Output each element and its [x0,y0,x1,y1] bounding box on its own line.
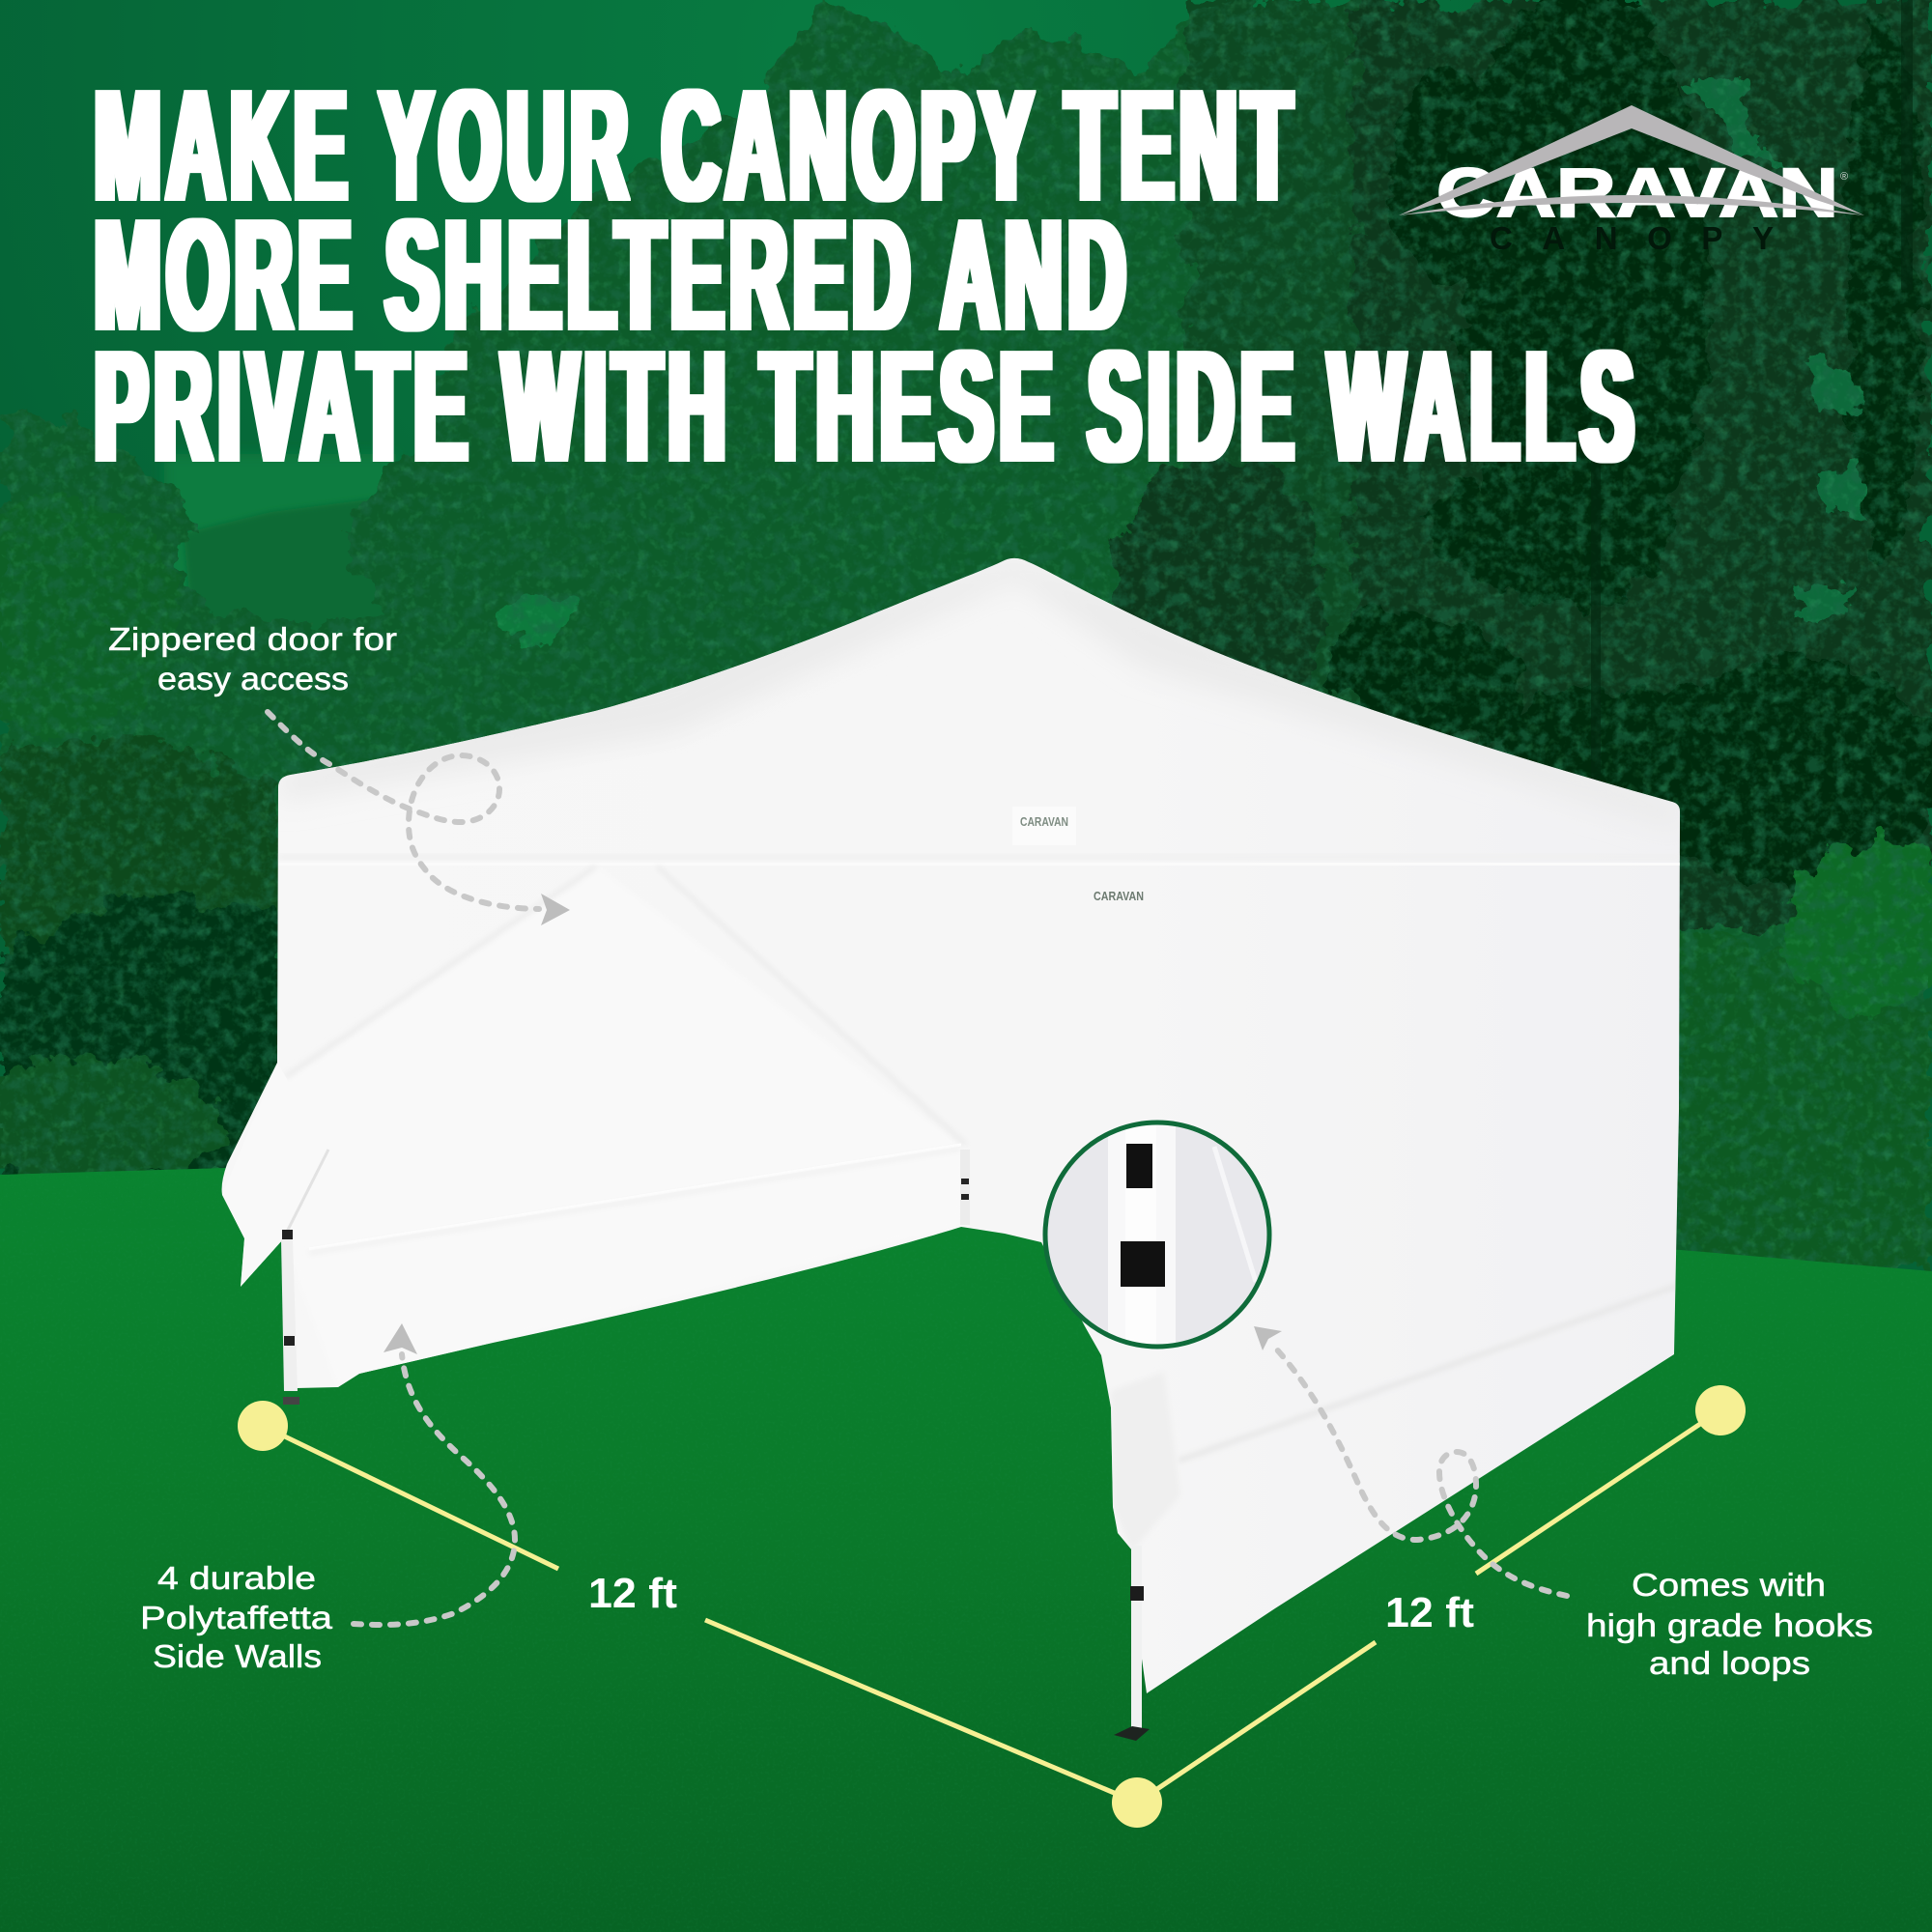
shrubs at lower right [1681,927,1932,1275]
callout: hooks and loops [1586,1567,1873,1681]
dot: left corner [238,1401,288,1451]
callout: zippered door: Zippered door for [108,621,397,657]
tent tag: front: CARAVAN [1020,814,1068,829]
title: MORE SHELTERED AND [95,187,1125,363]
pine trunks [1591,0,1913,840]
dimension label: right: 12 ft [1385,1589,1474,1636]
callout: hooks and loops: and loops [1649,1645,1810,1681]
transitional forest tone [1188,0,1381,773]
callout: side walls: 4 durable [157,1560,316,1596]
folded left flap [222,1063,281,1287]
mid-tone tree canopy [0,0,1932,1275]
hedge [0,1057,222,1184]
tent tag: side: CARAVAN [1094,889,1144,903]
left pole [281,1230,299,1405]
title [95,58,1634,495]
dark pine masses at right [1111,0,1932,927]
arrow: side walls [354,1323,515,1625]
lawn [0,1159,1932,1932]
callout: zippered door: easy access [157,661,349,696]
title: PRIVATE WITH THESE SIDE WALLS [95,319,1634,495]
arrow: hooks and loops [1254,1326,1567,1596]
dimension line: left side [263,1426,1137,1803]
callout: hooks and loops: Comes with [1632,1567,1826,1603]
background trees [0,0,1932,1275]
background: forest sky [0,0,1932,1352]
right front pole [1114,1546,1150,1741]
corner seam and hem [1142,744,1148,1140]
lit tree crown at left [0,502,184,734]
mist and distant hills [164,454,406,638]
tent tag: front [1012,807,1076,845]
dark understory at left [0,734,290,966]
roof and valance shading [278,558,1680,831]
dot: right corner [1695,1385,1746,1435]
door flap [338,1227,963,1387]
logo: Caravan Canopy: ® [1840,171,1848,183]
inset: hooks and loops detail [1044,1121,1270,1352]
logo: Caravan Canopy: CANOPY [1490,220,1774,256]
callout: hooks and loops: high grade hooks [1586,1607,1873,1643]
folded front flap [1109,1395,1130,1548]
tent [222,558,1680,1741]
dimension label: left: 12 ft [588,1570,677,1617]
second forest clearing [494,587,575,645]
callout: side walls [140,1560,333,1674]
callout: zippered door [108,621,397,696]
callout: side walls: Side Walls [153,1638,322,1674]
logo: Caravan Canopy [1399,105,1864,256]
title: MAKE YOUR CANOPY TENT [95,58,1292,234]
dot: front corner [1112,1777,1162,1828]
dimension line: right side [1137,1410,1720,1803]
logo: Caravan Canopy: CARAVAN [1436,156,1838,232]
sky gaps between the pines [1686,75,1864,618]
callout: side walls: Polytaffetta [140,1600,333,1635]
arrow: zippered door [268,712,570,925]
